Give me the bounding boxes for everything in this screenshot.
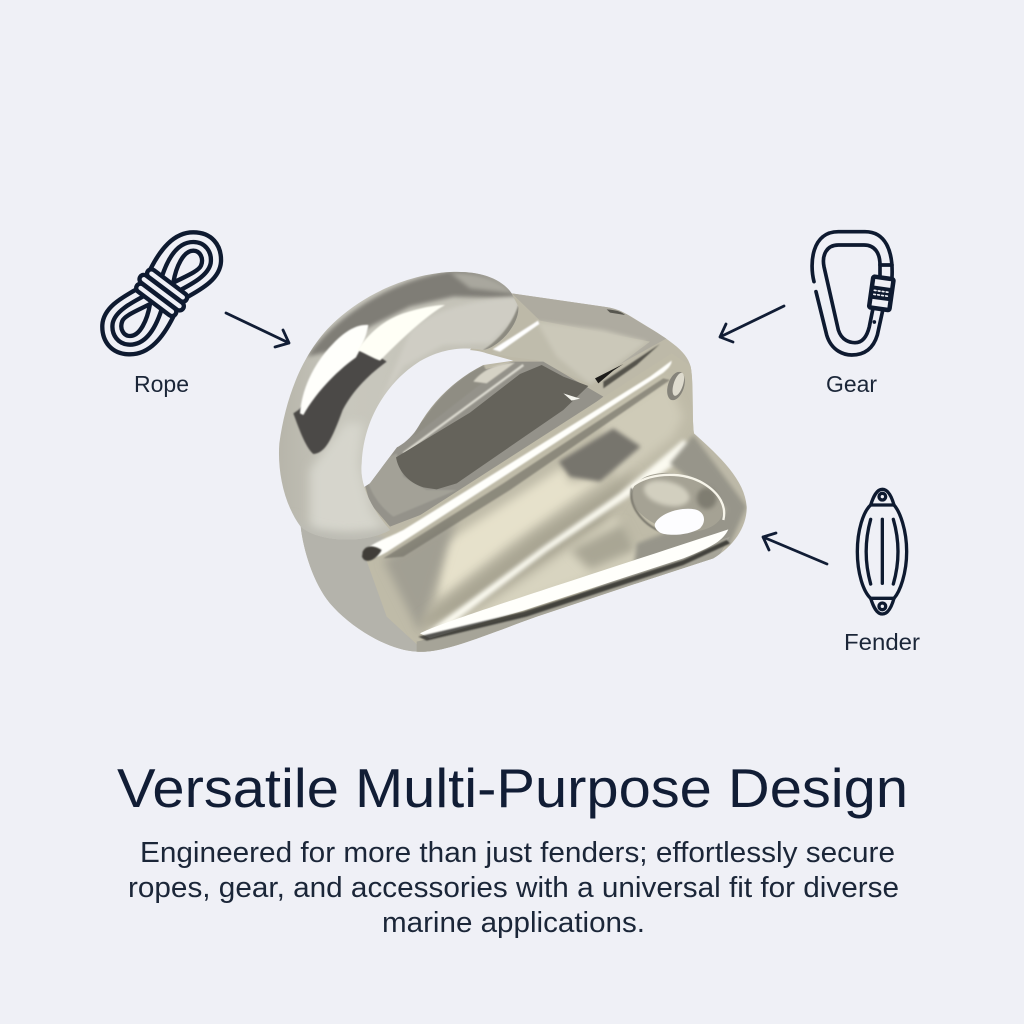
infographic canvas [100,230,920,938]
arrow: rope to hook [226,313,289,347]
flange lip highlight [420,529,728,638]
label: Gear: Gear [826,371,877,397]
ring foot blends into base [298,523,386,540]
label: Rope: Rope [134,371,189,397]
upper face lit areas [604,384,682,474]
ring top grey [307,270,518,357]
top plate [512,294,666,364]
top ridge highlight [365,361,672,557]
lower triangle lit [475,518,636,612]
label: Fender: Fender [844,629,920,655]
grey reflection patch [559,428,641,482]
hook body [300,294,747,652]
countersink recess [632,472,722,532]
left face shade [383,517,457,633]
icon: carabiner gear [812,232,894,355]
arrow: gear to hook [720,306,784,342]
description text [128,837,899,939]
central ridge highlight [427,440,694,633]
ring opening [362,350,513,467]
white highlight two [357,305,445,361]
product photo: stainless steel fender hook [270,263,753,660]
arrow: fender to hook [763,533,827,564]
icon: rope [102,232,221,354]
mounting hole [655,509,704,535]
lower left back shading [300,527,421,652]
title: Versatile Multi-Purpose Design [117,757,908,819]
white highlight one [300,325,368,415]
mid ridge shadow [420,470,637,627]
under lip outer edge [417,537,730,653]
description text: Engineered for more than just fenders; effortlessly secure [140,837,895,869]
description text: ropes, gear, and accessories with a universal fit for diverse [128,872,899,904]
upper loop [150,232,221,298]
tip shadow [483,306,518,350]
dark slot [396,365,588,489]
binding wraps [132,266,191,319]
description text: marine applications. [382,907,645,939]
lower ring light [308,424,378,531]
dark band [293,350,387,454]
inner plate [360,362,603,527]
curved ring [279,272,518,540]
screw gate collar [869,276,894,311]
lower loop [102,288,173,354]
right flange dark [633,435,747,570]
icon: boat fender [857,489,907,614]
small rivet [667,372,685,400]
ridge face [367,366,694,652]
strap highlight [493,321,539,352]
